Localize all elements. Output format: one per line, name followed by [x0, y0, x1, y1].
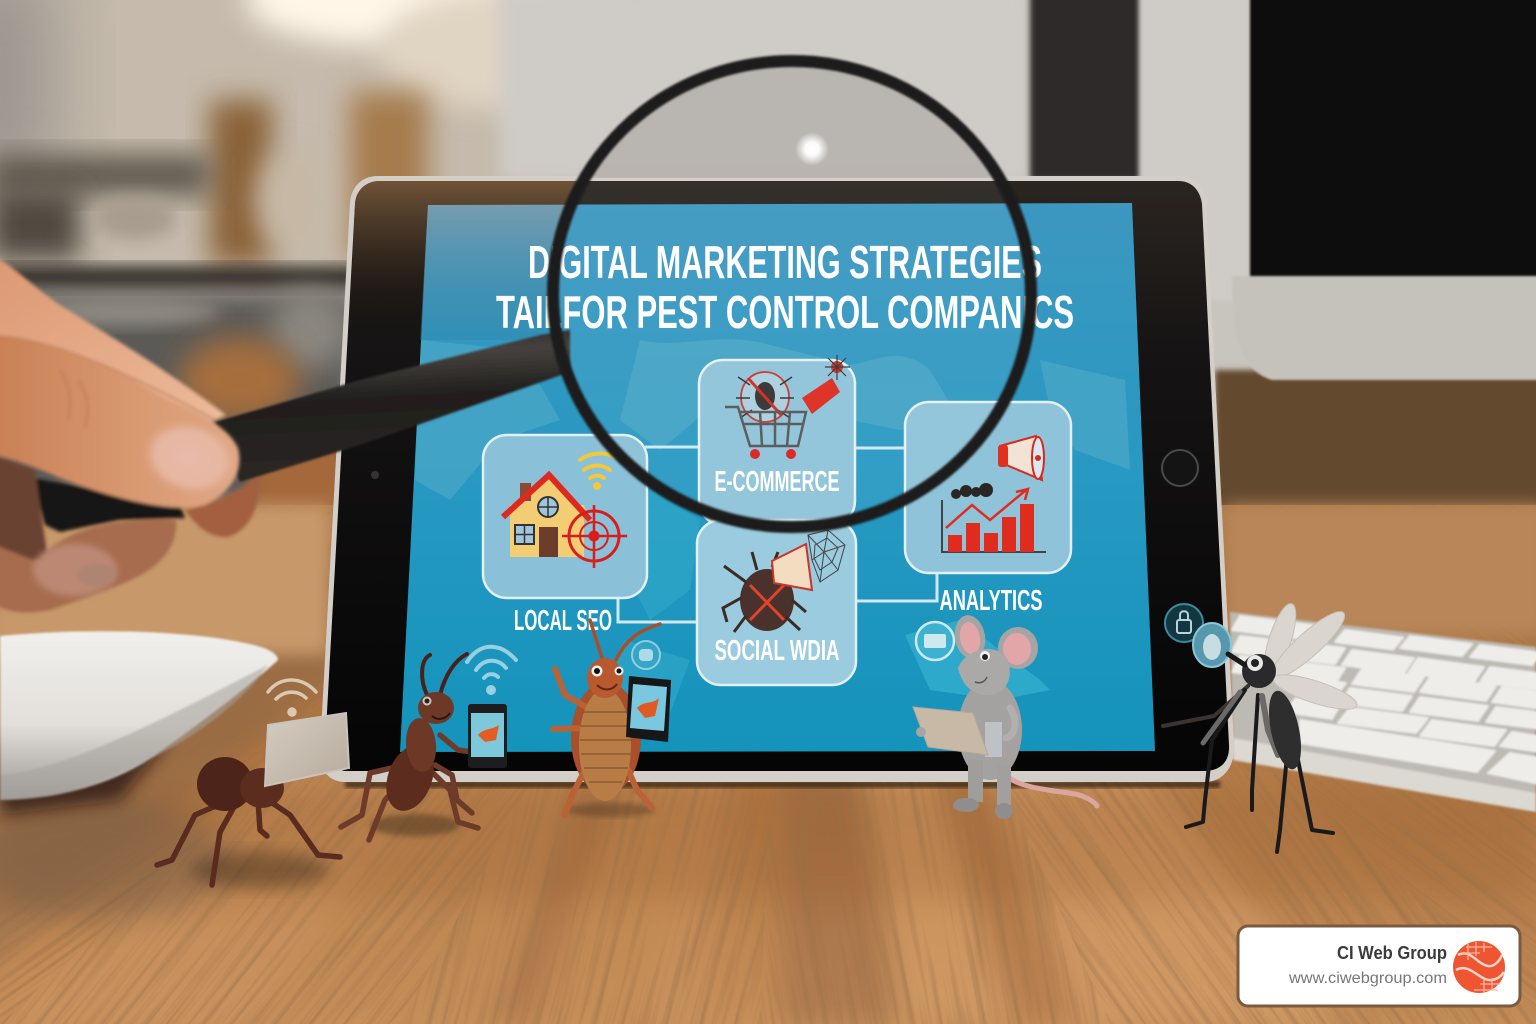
knuckle wrinkles: [60, 370, 88, 428]
keyboard: [1230, 612, 1536, 812]
logo badge: [1238, 926, 1520, 1006]
tablet: [320, 176, 1234, 782]
heading: tablet title: TAILFOR PEST CONTROL COMPANICS: [496, 286, 1074, 338]
badge logo: [1453, 941, 1505, 993]
top finger: [0, 258, 226, 425]
wooden desk: [0, 495, 1536, 1024]
screen haze: [420, 205, 571, 340]
wings: [1258, 600, 1360, 716]
icon: bar chart with trend: [942, 489, 1046, 552]
mosquito: [1163, 600, 1360, 852]
palm shadow: [0, 455, 48, 560]
main finger: [0, 336, 240, 508]
icon: beetle: [723, 552, 808, 632]
icon: shopping cart with bug: [725, 372, 806, 459]
laptop: [265, 713, 349, 786]
home button: [1162, 450, 1198, 486]
label: social media: SOCIAL WDIA: [714, 635, 840, 667]
icon: house: [503, 475, 590, 557]
icon: wifi on screen: [467, 647, 516, 693]
lens top tint: [591, 66, 993, 178]
cockroach with phone: [553, 620, 671, 817]
tablet screen: [400, 203, 1155, 752]
icon: wifi signal: [580, 454, 615, 488]
badge company name: CI Web Group: [1337, 943, 1447, 963]
tablet bezel: [325, 181, 1229, 771]
handle: [215, 330, 570, 482]
icon: badge circle on screen: [632, 641, 660, 669]
card: social media: [697, 520, 856, 685]
ant with phone: [341, 654, 507, 840]
hand holding handle: [0, 258, 258, 612]
wifi signal: [268, 680, 316, 715]
lens rim: [553, 61, 1031, 527]
icon: target: [562, 505, 627, 568]
desktop monitor: [1232, 0, 1536, 380]
handle end behind fingers: [33, 478, 185, 532]
computer mouse: [0, 631, 278, 815]
icon: megaphone and web: [772, 530, 845, 590]
phone: [468, 704, 507, 768]
magnifying glass: [215, 61, 1031, 527]
label: local SEO: LOCAL SEO: [514, 605, 612, 637]
icon: ant silhouette: [951, 483, 993, 499]
finger crease: [0, 336, 215, 420]
icon: lock bubble on bezel: [1165, 604, 1203, 642]
card: analytics: [905, 402, 1071, 617]
front camera: [371, 471, 379, 479]
icon: folder circle on screen: [916, 622, 954, 660]
tablet: [913, 707, 988, 755]
card: local SEO: [483, 435, 647, 637]
label: e-commerce: E-COMMERCE: [714, 466, 840, 498]
heading: tablet title: DIGITAL MARKETING STRATEGIES: [528, 236, 1042, 288]
fingernail: [132, 408, 248, 508]
ant with laptop: [157, 680, 349, 888]
tablet body: [320, 176, 1234, 782]
connector lines: [618, 447, 937, 622]
phone: [626, 676, 671, 742]
lens: [553, 61, 1031, 527]
lower finger: [0, 520, 176, 612]
bezel reflection: [349, 181, 583, 340]
icon: apple bubble on bezel: [1193, 623, 1231, 667]
icon: spray can: [802, 355, 850, 414]
mouse with tablet: [913, 613, 1097, 819]
card: e-commerce: [699, 355, 855, 525]
blurred office background: [0, 0, 1536, 520]
heading: tablet title: [496, 236, 1074, 338]
badge website: www.ciwebgroup.com: [1288, 970, 1447, 987]
label: analytics: ANALYTICS: [940, 585, 1042, 617]
icon: megaphone: [998, 436, 1044, 480]
back finger: [185, 478, 258, 537]
world map backdrop: [415, 339, 1130, 740]
lens highlight: [795, 132, 829, 166]
